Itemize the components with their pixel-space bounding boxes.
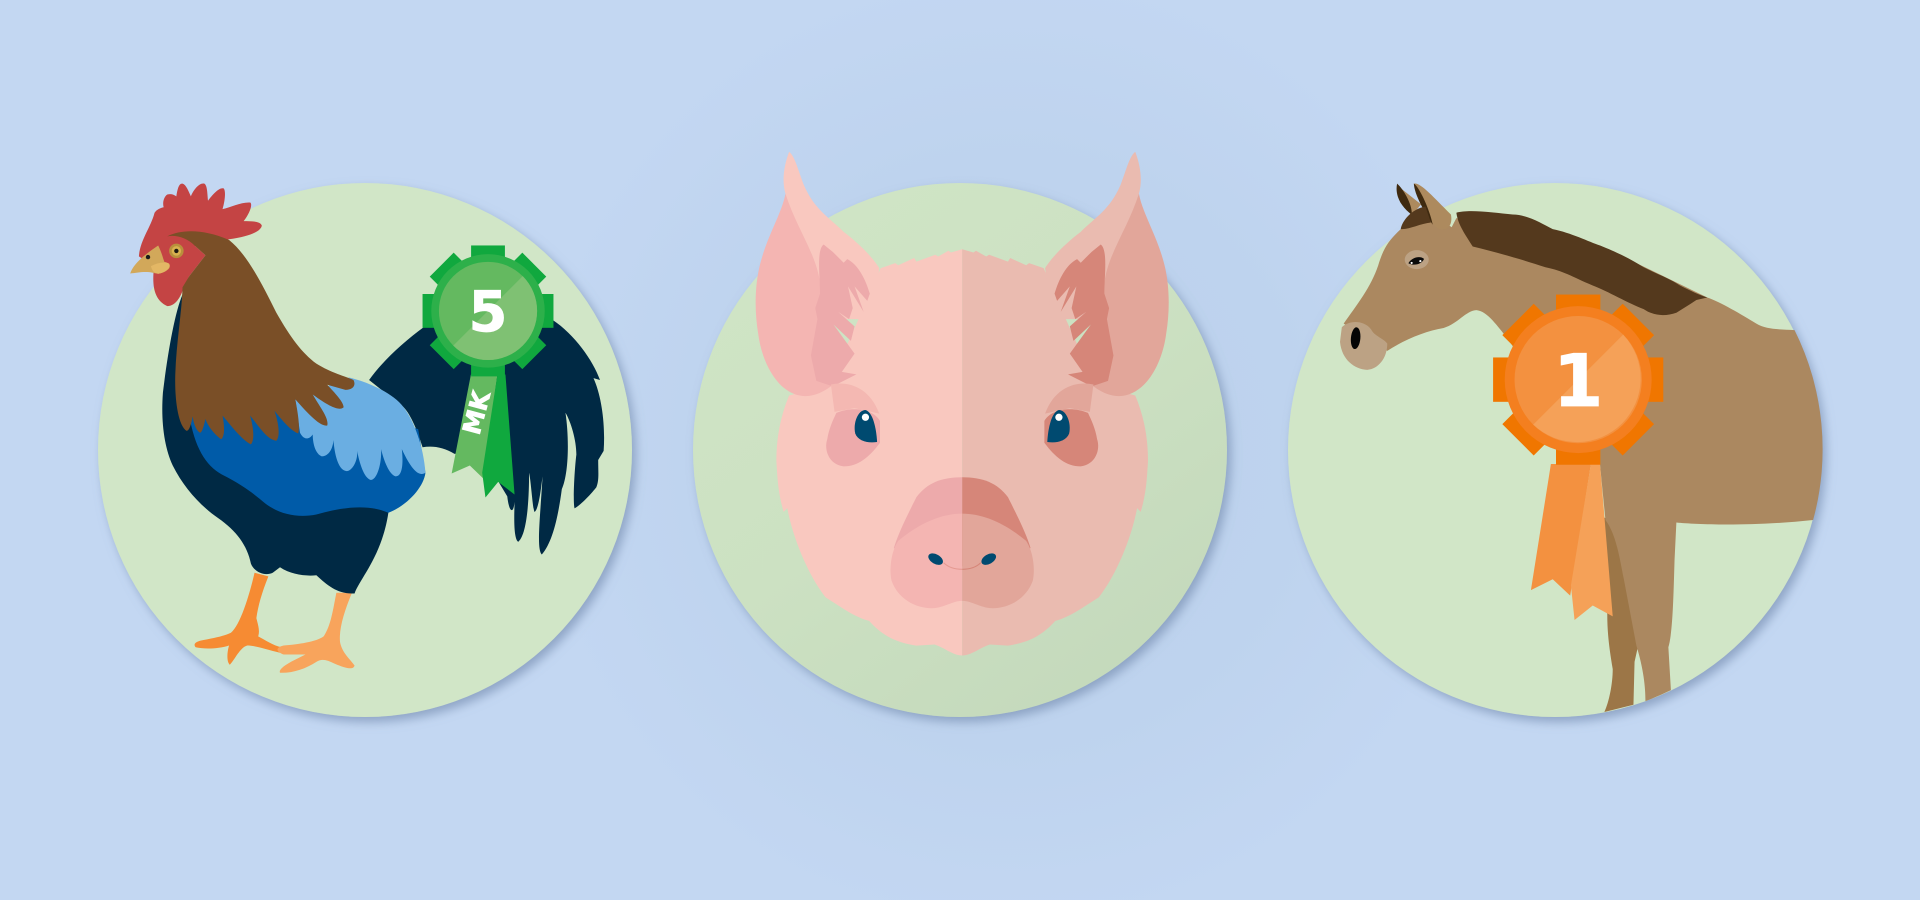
rooster right leg bbox=[277, 593, 355, 673]
rosette face bbox=[1515, 316, 1642, 443]
left nostril bbox=[926, 551, 945, 567]
left mouth line bbox=[944, 563, 962, 569]
rooster beak bbox=[130, 245, 170, 273]
right eye highlight bbox=[1055, 414, 1063, 421]
horse mane bbox=[1456, 211, 1707, 315]
pig left half bbox=[756, 152, 962, 655]
rosette ribbon left bbox=[1531, 464, 1591, 596]
disc: horse bbox=[1288, 183, 1822, 717]
green rosette bbox=[423, 245, 553, 497]
left ear fold bbox=[784, 152, 879, 319]
horse nostril bbox=[1350, 327, 1361, 349]
rooster comb bbox=[139, 184, 262, 265]
right nostril bbox=[979, 551, 998, 567]
horse far ear bbox=[1402, 189, 1421, 216]
rooster left leg bbox=[195, 573, 282, 665]
horse near ear dark edge bbox=[1414, 184, 1433, 225]
rosette ribbon dark bbox=[482, 375, 515, 497]
horse far ear dark edge bbox=[1397, 184, 1412, 215]
rosette teeth bbox=[423, 245, 553, 376]
rosette face highlight bbox=[453, 276, 537, 360]
illustration: pig head bbox=[756, 152, 1169, 655]
rooster brown neck feathers bbox=[167, 231, 354, 444]
illustration: horse with orange rosette bbox=[1340, 183, 1823, 712]
rosette ring bbox=[431, 254, 545, 368]
rosette number: 5 bbox=[469, 280, 507, 345]
left snout bbox=[891, 514, 962, 608]
left eye patch bbox=[826, 409, 880, 466]
disc: pig bbox=[693, 183, 1227, 717]
horse near ear bbox=[1414, 183, 1451, 229]
rooster tail bbox=[369, 320, 604, 555]
rosette teeth bbox=[1493, 295, 1663, 465]
left face bbox=[776, 249, 962, 655]
left eye highlight bbox=[862, 414, 869, 421]
left brow bbox=[831, 384, 879, 414]
background glow behind pig bbox=[500, 0, 1520, 900]
illustration: rooster with green rosette bbox=[130, 184, 604, 673]
pig right half bbox=[962, 152, 1169, 655]
horse forelock bbox=[1401, 207, 1431, 229]
left ear inner shade bbox=[811, 245, 870, 386]
rosette ring bbox=[1505, 306, 1652, 453]
right brow bbox=[1045, 384, 1093, 414]
horse far leg bbox=[1600, 516, 1638, 712]
horse eye bbox=[1405, 250, 1429, 269]
rosette number: 1 bbox=[1553, 340, 1603, 424]
horse muzzle bbox=[1340, 322, 1387, 370]
rooster nostril bbox=[146, 255, 150, 259]
right snout top bbox=[962, 477, 1031, 566]
rosette face highlight bbox=[1533, 335, 1641, 442]
rooster lower beak bbox=[151, 262, 170, 274]
disc: rooster bbox=[98, 183, 632, 717]
right ear outer bbox=[1093, 194, 1169, 396]
rooster blue belly bbox=[189, 393, 425, 516]
right mouth line bbox=[962, 563, 981, 569]
rooster eye bbox=[169, 244, 184, 258]
ribbon label: MK bbox=[457, 387, 496, 438]
rosette face bbox=[439, 262, 537, 360]
rooster face and wattle bbox=[149, 236, 205, 306]
left eye bbox=[855, 410, 877, 442]
left snout top bbox=[894, 477, 962, 566]
left ear outer bbox=[756, 194, 831, 396]
horse body bbox=[1344, 207, 1823, 701]
right ear fold bbox=[1045, 152, 1141, 319]
right eye patch bbox=[1044, 409, 1098, 466]
orange rosette bbox=[1493, 295, 1663, 620]
right snout bbox=[962, 514, 1034, 608]
rooster dark body bbox=[162, 295, 389, 594]
rosette ribbon right bbox=[1571, 464, 1613, 620]
right face bbox=[962, 249, 1148, 655]
rosette ribbon light bbox=[452, 375, 497, 478]
right eye bbox=[1047, 410, 1070, 442]
right ear inner shade bbox=[1055, 245, 1113, 386]
rooster light blue wing bbox=[295, 377, 425, 480]
